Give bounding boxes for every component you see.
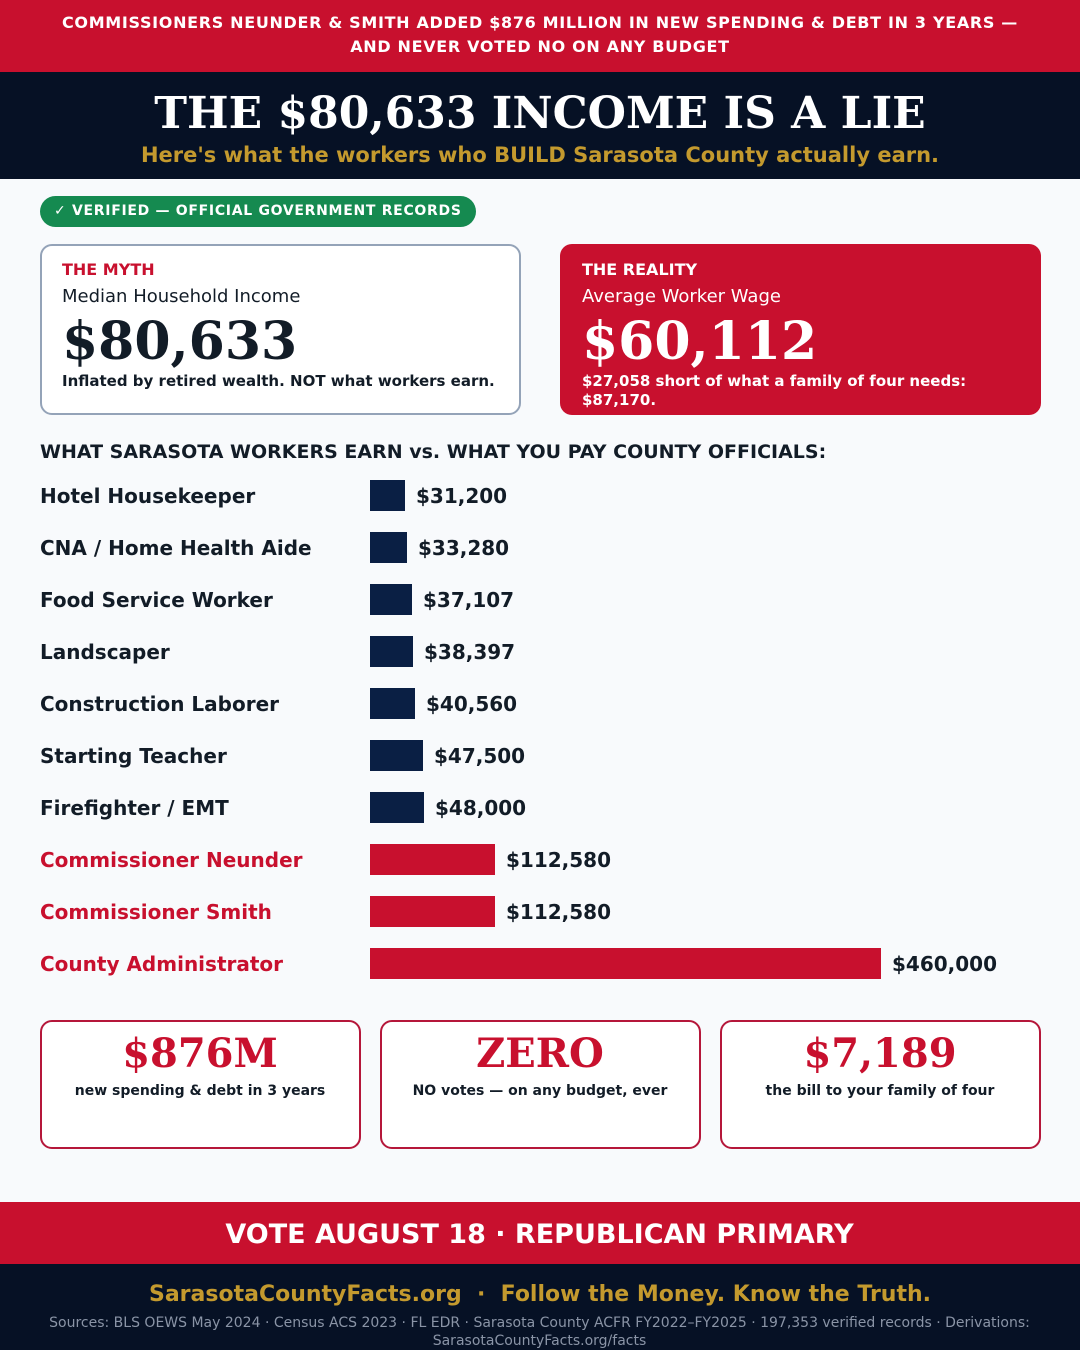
panel: the reality	[560, 244, 1041, 415]
reality number: $60,112	[582, 311, 817, 372]
chart heading: WHAT SARASOTA WORKERS EARN vs. WHAT YOU PAY COUNTY OFFICIALS:	[40, 441, 826, 463]
bar chart: $37,107	[423, 588, 514, 612]
row: construction laborer	[40, 688, 517, 719]
myth note: Inflated by retired wealth. NOT what workers earn.	[62, 372, 495, 390]
stat card: 876M: $876M	[122, 1030, 278, 1077]
sources: Sources: BLS OEWS May 2024 · Census ACS 2023 · FL EDR · Sarasota County ACFR FY2022–FY2025 · 197,353 verified records · Derivations: SarasotaCountyFacts.org/facts	[49, 1315, 1030, 1349]
bar chart: Construction Laborer	[40, 692, 279, 716]
bar chart: $40,560	[426, 692, 517, 716]
myth number: $80,633	[62, 311, 297, 372]
panel: the myth	[40, 244, 521, 415]
stat card: 7189: $7,189	[803, 1030, 957, 1077]
stat card: 876M: new spending & debt in 3 years	[75, 1083, 325, 1099]
title: THE $80,633 INCOME IS A LIE	[154, 88, 926, 139]
top banner	[0, 0, 1080, 72]
bar chart: $31,200	[416, 484, 507, 508]
bar chart: Food Service Worker	[40, 588, 273, 612]
verified badge: ✓ VERIFIED — OFFICIAL GOVERNMENT RECORDS	[54, 203, 462, 219]
reality label: THE REALITY	[582, 260, 697, 279]
vote banner: VOTE AUGUST 18 · REPUBLICAN PRIMARY	[225, 1219, 854, 1250]
myth label: THE MYTH	[62, 260, 155, 279]
stat card: zero: ZERO	[476, 1030, 604, 1077]
header	[0, 72, 1080, 179]
reality caption: Average Worker Wage	[582, 286, 781, 307]
row: food service	[40, 584, 514, 615]
bar chart: Hotel Housekeeper	[40, 484, 255, 508]
stat card: 876M	[40, 1020, 361, 1149]
myth caption: Median Household Income	[62, 286, 300, 307]
bar chart: Commissioner Neunder	[40, 848, 303, 872]
stat card: 7189: the bill to your family of four	[766, 1083, 994, 1099]
verified badge	[40, 196, 476, 227]
bar chart: County Administrator	[40, 952, 283, 976]
footer	[0, 1264, 1080, 1350]
stat card: 7189	[720, 1020, 1041, 1149]
bar chart: $112,580	[506, 848, 611, 872]
subtitle: Here's what the workers who BUILD Sarasota County actually earn.	[141, 143, 939, 167]
vote banner	[0, 1202, 1079, 1264]
row: starting teacher	[40, 740, 525, 771]
bar chart: $112,580	[506, 900, 611, 924]
bar chart: $47,500	[434, 744, 525, 768]
row: hotel housekeeper	[40, 480, 507, 511]
row: landscaper	[40, 636, 515, 667]
bar chart: Starting Teacher	[40, 744, 227, 768]
bar chart	[40, 480, 997, 979]
row: commissioner neunder	[40, 844, 611, 875]
top banner: COMMISSIONERS NEUNDER & SMITH ADDED $876 MILLION IN NEW SPENDING & DEBT IN 3 YEARS —	[62, 13, 1018, 32]
bar chart: CNA / Home Health Aide	[40, 536, 312, 560]
row: county administrator	[40, 948, 997, 979]
row: firefighter	[40, 792, 526, 823]
bar chart: $33,280	[418, 536, 509, 560]
bar chart: Commissioner Smith	[40, 900, 272, 924]
row: commissioner smith	[40, 896, 611, 927]
top banner: AND NEVER VOTED NO ON ANY BUDGET	[350, 37, 730, 56]
bar chart: $48,000	[435, 796, 526, 820]
bar chart: $460,000	[892, 952, 997, 976]
row: cna	[40, 532, 509, 563]
stat card: zero	[380, 1020, 701, 1149]
reality note: $27,058 short of what a family of four needs: $87,170.	[582, 372, 966, 409]
stat card: zero: NO votes — on any budget, ever	[413, 1083, 667, 1099]
footer tagline: SarasotaCountyFacts.org · Follow the Money. Know the Truth.	[149, 1282, 931, 1307]
bar chart: $38,397	[424, 640, 515, 664]
bar chart: Firefighter / EMT	[40, 796, 229, 820]
bar chart: Landscaper	[40, 640, 170, 664]
